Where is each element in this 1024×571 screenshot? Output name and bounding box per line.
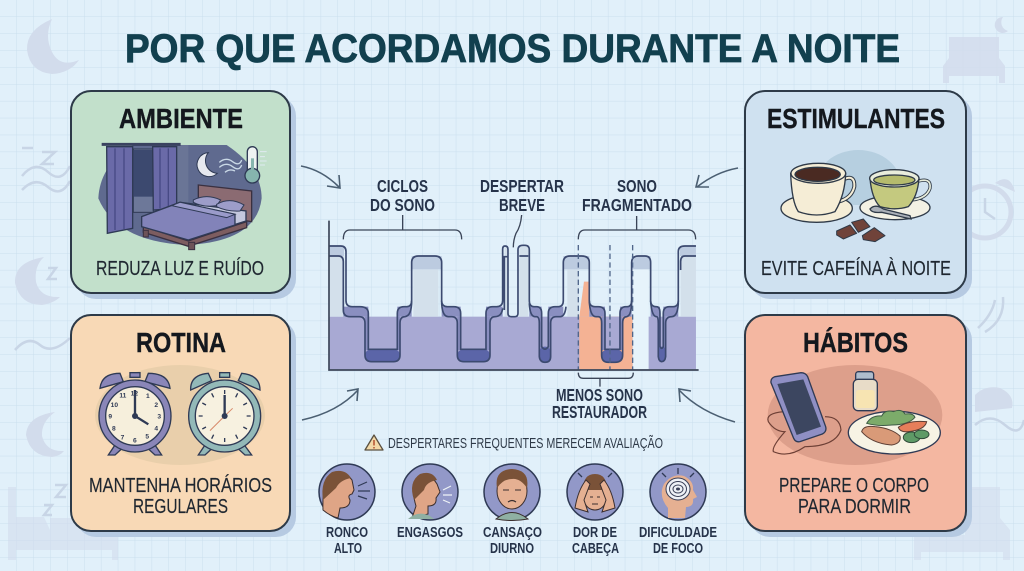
panel: estimulantes — [745, 91, 972, 299]
cable — [768, 412, 841, 454]
label: ronco alto: RONCO — [326, 525, 368, 541]
clock: plain — [189, 373, 261, 455]
heading: ambiente: AMBIENTE — [119, 103, 243, 134]
label: ronco alto: ALTO — [334, 541, 362, 557]
label: cansaco diurno: CANSAÇO — [483, 525, 542, 541]
label: ciclos do sono — [370, 176, 435, 215]
caption: estimulantes: EVITE CAFEÍNA À NOITE — [761, 257, 951, 280]
card: ambiente — [71, 91, 290, 293]
arrow: rotina to chart — [302, 389, 358, 420]
coffee cup — [781, 163, 854, 222]
symptom: dificuldade de foco — [639, 464, 717, 557]
sleep curve lines — [329, 245, 696, 362]
icon: alarm clocks: 8 — [112, 426, 116, 433]
plate — [848, 411, 940, 454]
icon: alarm clocks: 2 — [154, 402, 158, 409]
icon: alarm clocks: 1 — [146, 393, 150, 400]
label: cansaco diurno — [483, 525, 542, 557]
arrow: ambiente to chart — [301, 166, 340, 188]
label: despertar breve — [480, 176, 564, 215]
label: despertar breve: DESPERTAR — [480, 176, 564, 196]
label: engasgos: ENGASGOS — [397, 525, 463, 541]
symptom: dor de cabeca — [567, 464, 623, 557]
fragmentation dashed markers — [578, 245, 633, 369]
icon: alarm clocks: 10 — [111, 402, 118, 409]
label: menos sono restaurador — [552, 385, 647, 422]
label: despertar breve: BREVE — [499, 195, 545, 215]
panel: rotina — [71, 315, 296, 537]
title: POR QUE ACORDAMOS DURANTE A NOITE — [125, 27, 900, 71]
card: habitos — [745, 315, 966, 531]
chart background fill — [329, 317, 696, 369]
label: ciclos do sono: CICLOS — [377, 176, 428, 196]
icon: alarm clocks: 7 — [121, 434, 125, 441]
symptom: ronco alto — [319, 464, 375, 557]
arrow: habitos to chart — [679, 389, 735, 422]
tea cup — [860, 170, 930, 220]
label: dificuldade de foco — [639, 525, 717, 557]
label: menos sono restaurador: MENOS SONO — [556, 385, 643, 405]
icon: alarm clocks: 4 — [154, 426, 158, 433]
warning message: DESPERTARES FREQUENTES MERECEM AVALIAÇÃO — [388, 435, 663, 452]
arrow: estimulantes to chart — [696, 168, 738, 187]
icon: alarm clocks: 6 — [133, 438, 137, 445]
heading: habitos: HÁBITOS — [803, 327, 908, 358]
chart axes — [329, 221, 699, 370]
label: dificuldade de foco: DIFICULDADE — [639, 525, 717, 541]
icon: alarm clocks: 3 — [157, 413, 161, 420]
icon: phone, jar, plate — [768, 365, 942, 465]
phone — [771, 373, 826, 442]
caption: habitos — [779, 475, 929, 518]
label: sono fragmentado — [582, 176, 692, 215]
chocolates — [837, 219, 885, 242]
bracket: despertar breve — [513, 215, 522, 247]
bracket: sono fragmentado — [578, 216, 696, 239]
icon: alarm clocks: 5 — [145, 434, 149, 441]
jar — [856, 372, 874, 382]
icon: alarm clocks: 9 — [108, 414, 112, 421]
heading: rotina: ROTINA — [136, 327, 226, 358]
label: menos sono restaurador: RESTAURADOR — [552, 402, 647, 422]
icon: alarm clocks: 12 — [131, 390, 138, 397]
caption: habitos: PREPARE O CORPO — [779, 475, 929, 497]
bracket: ciclos do sono — [343, 215, 462, 239]
label: cansaco diurno: DIURNO — [490, 541, 534, 557]
label: sono fragmentado: FRAGMENTADO — [582, 195, 692, 215]
symptom: engasgos — [397, 464, 463, 541]
icon: alarm clocks: 11 — [119, 392, 127, 399]
label: sono fragmentado: SONO — [617, 176, 657, 196]
icon: coffee, tea, chocolate — [781, 150, 930, 242]
caption: habitos: PARA DORMIR — [798, 496, 911, 518]
label: dor de cabeca: DOR DE — [573, 525, 617, 541]
label: ciclos do sono: DO SONO — [370, 195, 435, 215]
symptom: cansaco diurno — [483, 464, 542, 557]
caption: rotina: REGULARES — [133, 496, 228, 518]
label: ronco alto — [326, 525, 368, 557]
panel: ambiente — [71, 91, 296, 299]
panel: habitos — [745, 315, 972, 537]
label: dor de cabeca — [572, 525, 619, 557]
heading: estimulantes: ESTIMULANTES — [767, 103, 945, 134]
chart: sleep cycles hypnogram — [329, 215, 699, 387]
card: estimulantes — [745, 91, 966, 293]
caption: ambiente: REDUZA LUZ E RUÍDO — [96, 257, 264, 280]
card: rotina — [71, 315, 290, 531]
icon: alarm clocks — [95, 365, 265, 465]
clock: numbered — [99, 373, 171, 455]
caption: rotina — [89, 474, 272, 518]
bracket: menos sono restaurador — [578, 373, 633, 387]
caption: rotina: MANTENHA HORÁRIOS — [89, 474, 272, 497]
label: dificuldade de foco: DE FOCO — [653, 541, 703, 557]
icon: bedroom — [98, 144, 267, 250]
icon: warning triangle — [365, 435, 383, 450]
label: dor de cabeca: CABEÇA — [572, 541, 619, 557]
